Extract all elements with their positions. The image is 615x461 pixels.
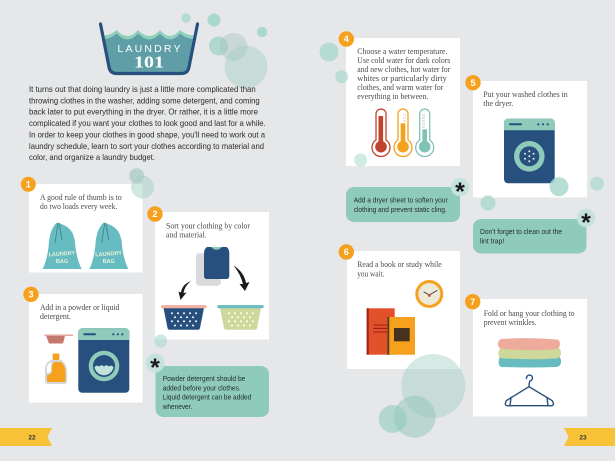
arrow: to light basket <box>234 266 250 291</box>
callout: dryer sheet tip: Add a dryer sheet to soften your <box>354 196 448 204</box>
intro text block: color, and organize a laundry budget. <box>29 152 155 162</box>
icon: laundry bag right: LAUNDRY <box>95 251 122 258</box>
panel: step 4 <box>339 31 460 166</box>
icon: dark basket <box>161 305 207 330</box>
panel: step 5: Put your washed clothes in <box>483 90 568 99</box>
callout: detergent tip: Powder detergent should be <box>163 374 245 383</box>
panel: step 5 <box>465 75 587 198</box>
panel: step 7 <box>465 294 587 416</box>
page number banner 22: 22 <box>28 434 36 442</box>
panel: step 4: everything in between. <box>357 92 428 101</box>
page number banner 23 <box>564 428 615 446</box>
panel: step 1 <box>21 177 142 272</box>
intro text block: In order to keep your clothes in good shape, you'll need to work out a <box>29 130 265 140</box>
title: Laundry 101 wash tub: LAUNDRY <box>118 43 180 55</box>
panel: step 4: whites or particularly dirty <box>357 74 447 83</box>
icon: hanger <box>505 375 553 406</box>
panel: step 4: and new clothes, hot water for <box>357 65 451 74</box>
badge 1: 1 <box>26 180 31 190</box>
callout: lint trap tip: * <box>581 209 591 237</box>
icon: washing machine <box>78 328 129 393</box>
panel: step 1: do two loads every week. <box>40 202 117 211</box>
callout: dryer sheet tip: clothing and prevent static cling. <box>354 205 447 214</box>
intro text block: complicated if you want your clothes to look good and last for a while. <box>29 118 266 128</box>
panel: step 6: you wait. <box>357 270 384 278</box>
panel: step 1: A good rule of thumb is to <box>40 193 122 202</box>
badge 6: 6 <box>344 247 349 257</box>
callout: detergent tip: whenever. <box>162 402 192 411</box>
badge 5: 5 <box>470 78 476 88</box>
intro text block: throwing clothes in the washer, adding some detergent, and coming <box>29 95 260 105</box>
icon: laundry bag left: LAUNDRY <box>48 251 76 258</box>
intro text block <box>29 84 266 162</box>
panel: step 2: and material. <box>166 230 207 240</box>
icon: laundry bag left <box>43 222 82 269</box>
badge 4: 4 <box>344 34 349 44</box>
title: Laundry 101 wash tub: 101 <box>134 52 164 72</box>
intro text block: It turns out that doing laundry is just a little more complicated than <box>29 84 256 94</box>
panel: step 6: Read a book or study while <box>357 260 442 269</box>
callout: detergent tip: * <box>150 354 160 382</box>
icon: laundry bag right <box>89 222 128 269</box>
callout: dryer sheet tip <box>346 178 469 222</box>
icon: laundry bag right: BAG <box>103 259 115 265</box>
badge 2: 2 <box>152 209 158 219</box>
icon: laundry bag left: BAG <box>56 259 68 265</box>
panel: step 6 <box>339 244 460 369</box>
decorative bubbles over the panels <box>129 42 604 438</box>
icon: clock <box>415 280 443 308</box>
icon: folded towels <box>498 338 561 368</box>
decorative bubbles around title <box>181 13 268 88</box>
arrow: to dark basket <box>178 281 191 300</box>
icon: warm thermometer <box>394 109 412 156</box>
panel: step 2 <box>147 206 269 340</box>
icon: measuring scoop <box>44 334 73 344</box>
icon: light basket <box>217 305 264 330</box>
panel: step 4: Choose a water temperature. <box>357 47 447 56</box>
callout: detergent tip <box>146 354 269 417</box>
callout: lint trap tip: lint trap! <box>480 236 504 246</box>
panel: step 4: Use cold water for dark colors <box>357 56 450 65</box>
badge 3: 3 <box>28 290 34 300</box>
badge 7: 7 <box>470 297 475 307</box>
panel: step 7: prevent wrinkles. <box>484 318 537 327</box>
panel: step 3: detergent. <box>40 312 71 321</box>
callout: detergent tip: added before your clothes. <box>163 383 241 392</box>
panel: step 3: Add in a powder or liquid <box>40 303 119 312</box>
panel: step 4: clothes, and warm water for <box>357 83 444 92</box>
callout: detergent tip: Liquid detergent can be added <box>163 393 251 402</box>
callout: dryer sheet tip: * <box>455 178 465 206</box>
icon: books <box>367 308 415 355</box>
icon: cold thermometer <box>416 109 434 156</box>
icon: detergent bottle <box>45 354 67 384</box>
callout: lint trap tip <box>473 209 595 254</box>
callout: lint trap tip: Don't forget to clean out the <box>480 227 562 236</box>
icon: stacked shirts <box>196 247 229 286</box>
icon: dryer <box>504 119 555 183</box>
page number banner 23: 23 <box>579 434 587 442</box>
title: Laundry 101 wash tub <box>100 24 198 74</box>
panel: step 2: Sort your clothing by color <box>166 222 250 230</box>
intro text block: back later to put everything in the dryer. Or rather, it is a little more <box>29 107 258 117</box>
page number banner 22 <box>0 428 52 446</box>
panel: step 5: the dryer. <box>483 99 513 108</box>
icon: hot thermometer <box>372 109 390 156</box>
intro text block: laundry schedule, learn to sort your clothes according to material and <box>29 141 264 151</box>
panel: step 3 <box>23 287 142 402</box>
panel: step 7: Fold or hang your clothing to <box>484 309 575 318</box>
